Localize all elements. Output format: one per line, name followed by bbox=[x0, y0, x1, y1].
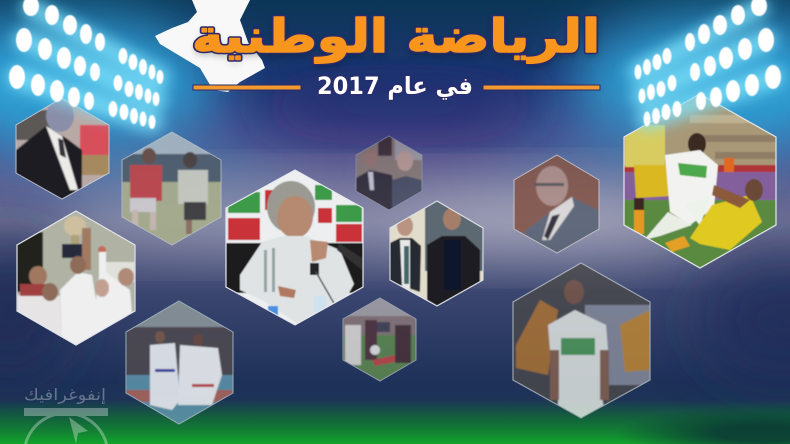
hexagon photo: two men standing bbox=[390, 201, 484, 307]
title: الرياضة الوطنية bbox=[192, 9, 600, 63]
watermark logo: إنفوغرافيك bbox=[24, 385, 106, 405]
subtitle with side rules bbox=[193, 72, 600, 100]
hexagon photo: coach at press conference bbox=[226, 170, 364, 326]
stadium lights: left bbox=[9, 0, 164, 129]
hexagon photo: official in black suit bbox=[16, 98, 110, 200]
title: الرياضة الوطنية bbox=[192, 12, 600, 66]
title: الرياضة الوطنية bbox=[192, 9, 600, 63]
hexagon photo: Algeria player number 2 bbox=[513, 263, 651, 420]
hexagon photo: football match, small bbox=[343, 298, 417, 382]
hexagon photo: two officials, small bbox=[356, 136, 425, 212]
hexagon photo: karate match bbox=[126, 301, 234, 425]
stadium lights: right bbox=[634, 0, 781, 126]
hexagon photo: rugby players bbox=[122, 132, 222, 246]
subtitle with side rules: في عام 2017 bbox=[317, 72, 473, 100]
hexagon photo: elderly official bbox=[514, 155, 600, 254]
map of Algeria bbox=[155, 0, 265, 92]
hexagon photo: team lifting trophy bbox=[17, 211, 135, 345]
watermark logo bbox=[24, 385, 108, 444]
hexagon photo: Algeria player in tackle bbox=[624, 94, 776, 270]
